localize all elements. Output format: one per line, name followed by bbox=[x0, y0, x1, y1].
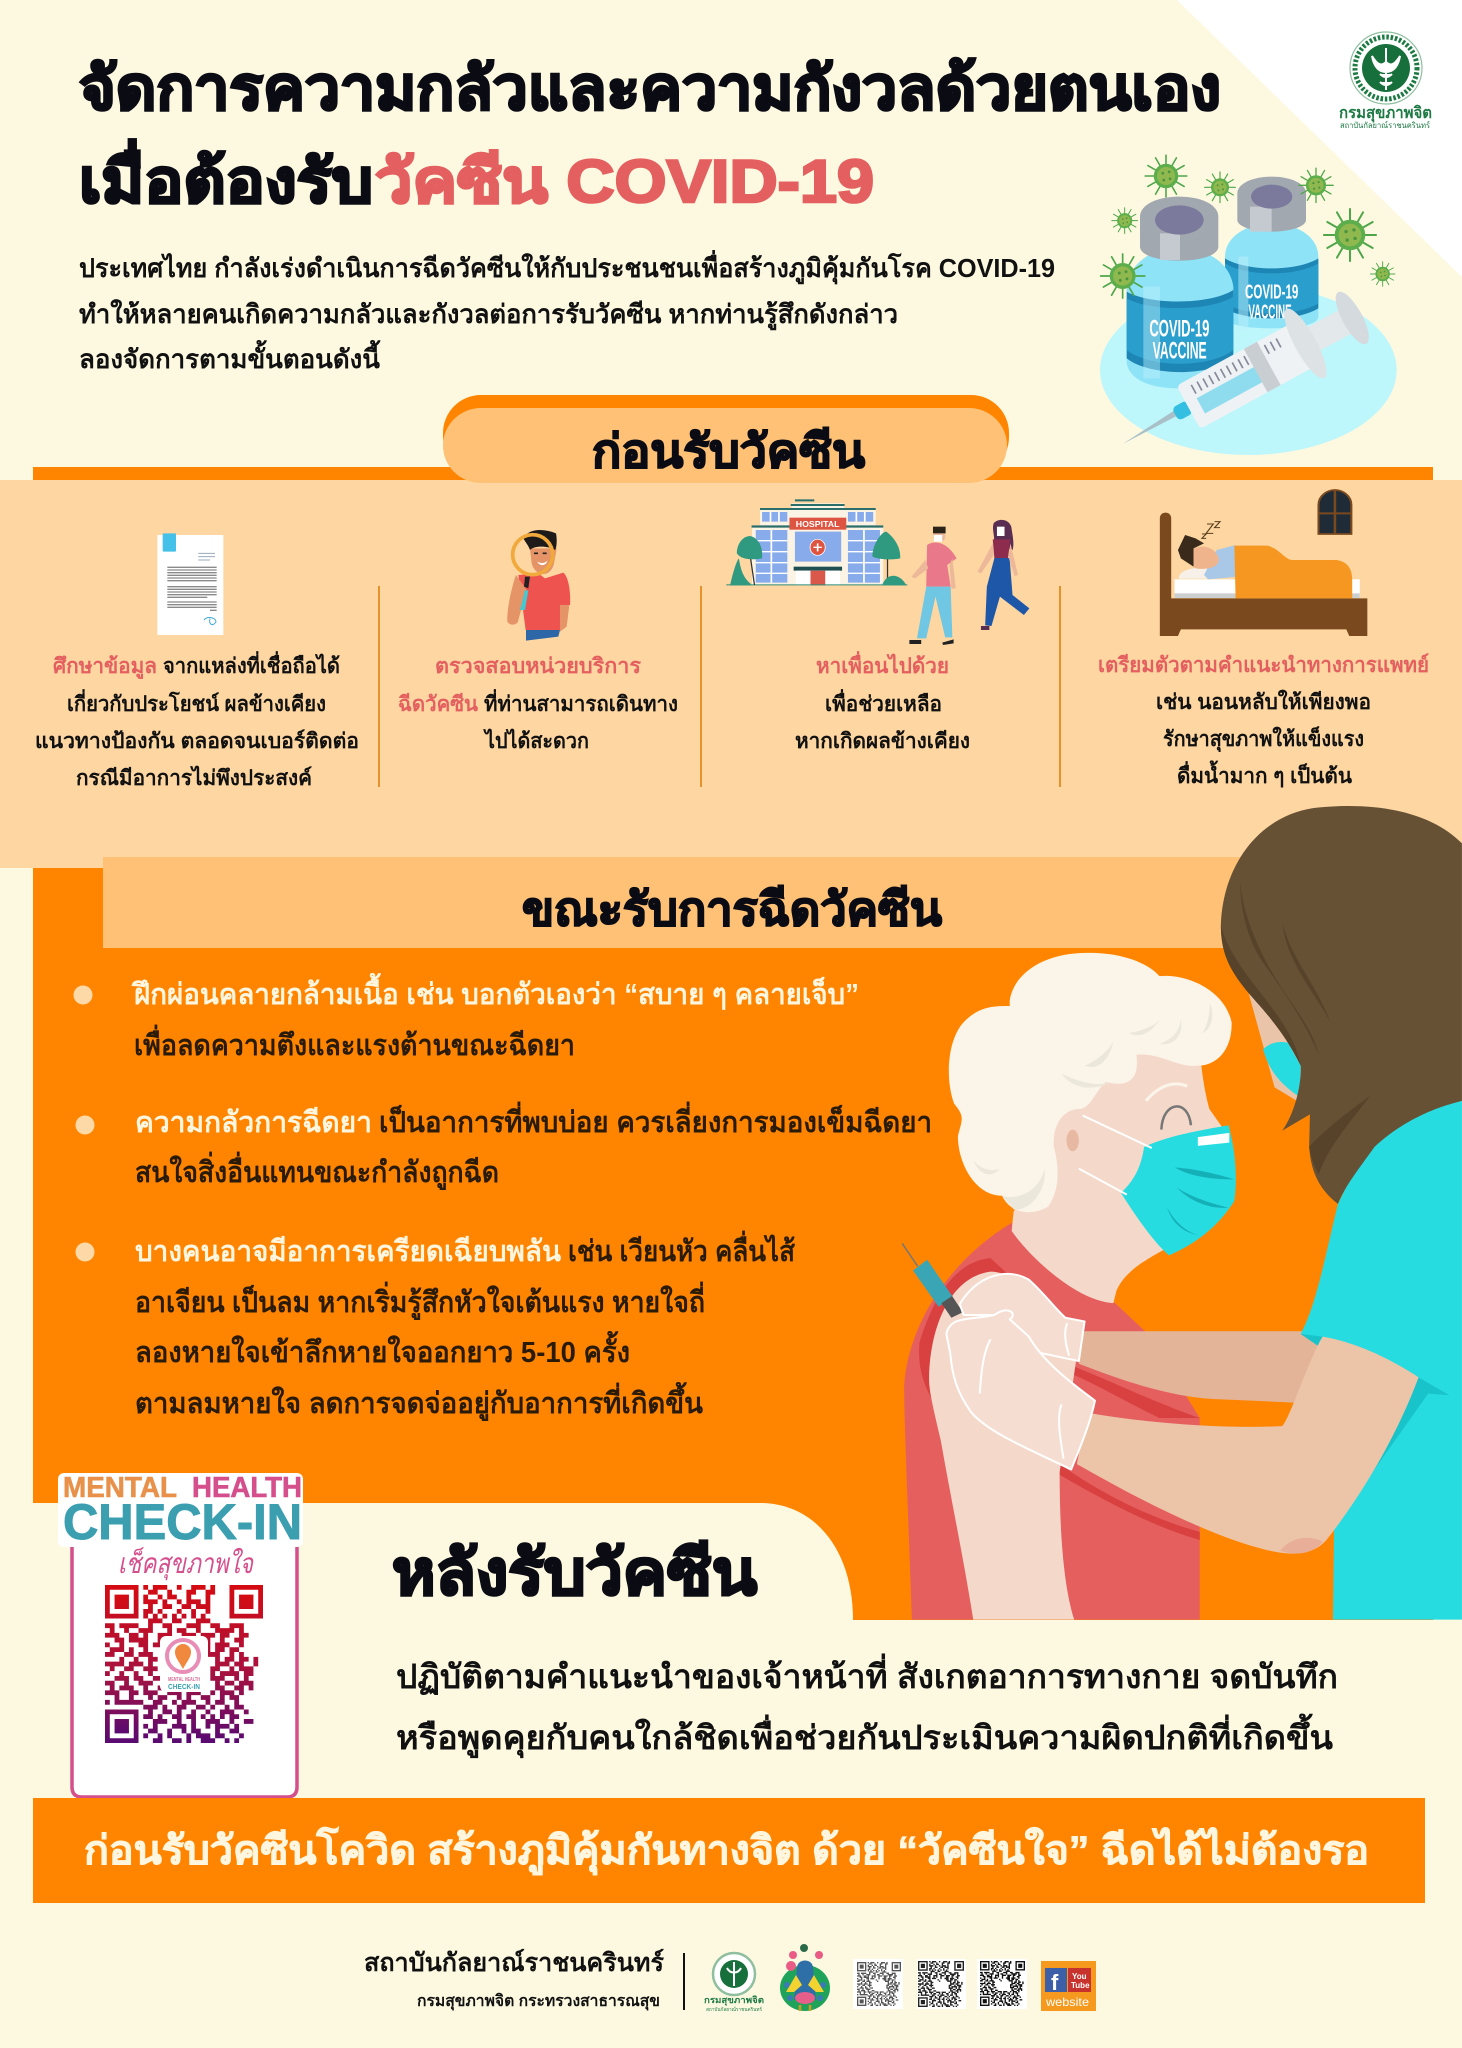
bullet list: ความกลัวการฉีดยา bbox=[135, 1107, 372, 1139]
text: step 2 check service: ตรวจสอบหน่วยบริการ bbox=[435, 655, 642, 678]
patient arm bbox=[929, 1272, 1079, 1620]
illustration: vaccine vials and syringe bbox=[1100, 155, 1397, 478]
vial back: COVID-19 bbox=[1245, 280, 1298, 303]
card: mental health check-in bbox=[58, 1472, 303, 1797]
bullet list: อาเจียน เป็นลม หากเริ่มรู้สึกหัวใจเต้นแรง หายใจถี่ bbox=[135, 1281, 705, 1320]
logo: department of mental health: สถาบันกัลยาณ์ราชนครินทร์ bbox=[1340, 120, 1431, 130]
patient eye and brow bbox=[1146, 1084, 1191, 1130]
footer logo: department: สถาบันกัลยาณ์ราชนครินทร์ bbox=[706, 2006, 762, 2013]
intro paragraph bbox=[79, 249, 1055, 374]
icon: hospital: HOSPITAL bbox=[796, 520, 840, 530]
vial front: VACCINE bbox=[1153, 337, 1207, 364]
card: mental health check-in: CHECK-IN bbox=[63, 1494, 302, 1550]
text: step 1 learn: จากแหล่งที่เชื่อถือได้ bbox=[163, 650, 340, 678]
bullet list: บางคนอาจมีอาการเครียดเฉียบพลัน bbox=[135, 1236, 561, 1268]
text: step 3 find a friend: หาเพื่อนไปด้วย bbox=[816, 650, 949, 678]
intro paragraph: ลองจัดการตามขั้นตอนดังนี้ bbox=[79, 339, 381, 374]
icon: two people walking bbox=[909, 520, 1029, 645]
footer logo: department bbox=[704, 1953, 764, 2013]
after-vaccination tab shape bbox=[33, 1503, 853, 1620]
heading: before vaccination: ก่อนรับวัคซีน bbox=[592, 425, 866, 477]
bullet list: เพื่อลดความตึงและแรงต้านขณะฉีดยา bbox=[134, 1024, 575, 1062]
panel: before vaccination bbox=[0, 395, 1462, 868]
intro paragraph: ประเทศไทย กำลังเร่งดำเนินการฉีดวัคซีนให้กับประชนชนเพื่อสร้างภูมิคุ้มกันโรค COVID-19 bbox=[79, 249, 1055, 285]
title bbox=[79, 55, 1221, 215]
footer icon: website: website bbox=[1045, 1995, 1089, 2009]
text: step 4 prepare: ดื่มน้ำมาก ๆ เป็นต้น bbox=[1177, 760, 1353, 788]
logo: department of mental health bbox=[1339, 32, 1432, 130]
illustration: nurse vaccinating patient bbox=[902, 806, 1462, 1620]
footer icon: website bbox=[1041, 1961, 1096, 2011]
text: step 1 learn: เกี่ยวกับประโยชน์ ผลข้างเคียง bbox=[67, 688, 326, 716]
heading: after vaccination: หลังรับวัคซีน bbox=[392, 1539, 757, 1608]
viruses bbox=[1101, 155, 1395, 298]
card: mental health check-in: MENTAL bbox=[63, 1472, 177, 1504]
title: จัดการความกลัวและความกังวลด้วยตนเอง bbox=[79, 55, 1221, 122]
banner bbox=[33, 1798, 1425, 1903]
intro paragraph: ทำให้หลายคนเกิดความกลัวและกังวลต่อการรับวัคซีน หากท่านรู้สึกดังกล่าว bbox=[79, 299, 898, 331]
text: step 4 prepare: รักษาสุขภาพให้แข็งแรง bbox=[1163, 725, 1364, 753]
bullet list: ตามลมหายใจ ลดการจดจ่ออยู่กับอาการที่เกิดขึ้น bbox=[135, 1381, 703, 1421]
text: step 3 find a friend: เพื่อช่วยเหลือ bbox=[825, 688, 942, 716]
bullet list: เป็นอาการที่พบบ่อย ควรเลี่ยงการมองเข็มฉีดยา bbox=[379, 1101, 932, 1139]
bullet list: ฝึกผ่อนคลายกล้ามเนื้อ เช่น บอกตัวเองว่า “สบาย ๆ คลายเจ็บ” bbox=[131, 972, 859, 1011]
text: after vaccination advice bbox=[396, 1653, 1338, 1759]
syringe bbox=[1104, 279, 1380, 478]
QR code bbox=[105, 1587, 261, 1741]
patient hair bbox=[949, 953, 1232, 1212]
vial front: COVID-19 bbox=[1149, 316, 1209, 343]
text: step 3 find a friend: หากเกิดผลข้างเคียง bbox=[795, 729, 970, 753]
icon: document bbox=[157, 533, 223, 635]
text: step 1 learn bbox=[35, 650, 359, 790]
footer text: กรมสุขภาพจิต กระทรวงสาธารณสุข bbox=[417, 1992, 660, 2011]
text: step 4 prepare: เตรียมตัวตามคำแนะนำทางการแพทย์ bbox=[1098, 653, 1429, 677]
gloves bbox=[946, 1274, 1095, 1469]
nurse face and mask bbox=[1248, 990, 1301, 1104]
text: after vaccination advice: ปฏิบัติตามคำแนะนำของเจ้าหน้าที่ สังเกตอาการทางกาย จดบันทึก bbox=[396, 1653, 1338, 1695]
icon: window bbox=[1319, 490, 1351, 534]
text: step 2 check service: ที่ท่านสามารถเดินทาง bbox=[484, 688, 678, 716]
bullet list: ลองหายใจเข้าลึกหายใจออกยาว 5-10 ครั้ง bbox=[135, 1330, 630, 1369]
title: วัคซีน COVID-19 bbox=[375, 148, 874, 215]
patient neck and face bbox=[1012, 1033, 1229, 1303]
banner: ก่อนรับวัคซีนโควิด สร้างภูมิคุ้มกันทางจิต ด้วย “วัคซีนใจ” ฉีดได้ไม่ต้องรอ bbox=[84, 1827, 1369, 1876]
bullet list: สนใจสิ่งอื่นแทนขณะกำลังถูกฉีด bbox=[135, 1151, 499, 1190]
patient mask bbox=[1079, 1116, 1236, 1255]
text: step 4 prepare bbox=[1098, 653, 1429, 788]
nurse near arm bbox=[1077, 1337, 1419, 1554]
heading: during vaccination: ขณะรับการฉีดวัคซีน bbox=[522, 883, 943, 935]
patient shirt bbox=[904, 1223, 1200, 1620]
text: after vaccination advice: หรือพูดคุยกับคนใกล้ชิดเพื่อช่วยกันประเมินความผิดปกติที่เกิดขึ้น bbox=[396, 1713, 1333, 1759]
patient ear bbox=[1053, 1110, 1088, 1171]
footer icon: website: f bbox=[1051, 1970, 1059, 1995]
footer logo: peacock bbox=[780, 1944, 830, 2011]
QR code: CHECK-IN bbox=[168, 1684, 200, 1691]
icon: hospital bbox=[726, 499, 907, 585]
text: step 3 find a friend bbox=[795, 650, 970, 753]
title: เมื่อต้องรับ bbox=[79, 139, 373, 215]
vial back bbox=[1225, 177, 1318, 330]
syringe in hand bbox=[902, 1243, 963, 1318]
bullet list bbox=[74, 972, 932, 1421]
nurse hair bbox=[1221, 806, 1462, 1204]
text: step 1 learn: กรณีมีอาการไม่พึงประสงค์ bbox=[76, 765, 312, 790]
text: step 2 check service: ฉีดวัคซีน bbox=[398, 692, 479, 716]
footer text: สถาบันกัลยาณ์ราชนครินทร์ bbox=[364, 1948, 665, 1977]
text: step 2 check service: ไปได้สะดวก bbox=[483, 728, 589, 753]
after-vaccination bottom strip bbox=[0, 1620, 1462, 1798]
footer logo: department: กรมสุขภาพจิต bbox=[704, 1995, 764, 2006]
woman bbox=[978, 520, 1029, 630]
footer icon: website: Tube bbox=[1071, 1981, 1090, 1990]
icon: person sleeping in bed bbox=[1160, 513, 1367, 636]
vial front bbox=[1127, 197, 1233, 388]
text: step 4 prepare: เช่น นอนหลับให้เพียงพอ bbox=[1156, 689, 1371, 714]
text: step 1 learn: แนวทางป้องกัน ตลอดจนเบอร์ติดต่อ bbox=[35, 729, 359, 753]
logo: department of mental health: กรมสุขภาพจิต bbox=[1339, 104, 1432, 123]
icon: person with magnifier bbox=[507, 530, 570, 641]
text: step 1 learn: ศึกษาข้อมูล bbox=[53, 654, 157, 680]
vial back: VACCINE bbox=[1248, 300, 1292, 323]
panel: during vaccination bbox=[33, 857, 1433, 1620]
footer text bbox=[364, 1948, 685, 2011]
man bbox=[909, 527, 957, 645]
text: step 2 check service bbox=[398, 655, 678, 753]
card: mental health check-in: เช็คสุขภาพใจ bbox=[118, 1547, 254, 1581]
nurse body bbox=[1301, 1101, 1462, 1620]
bullet list: เช่น เวียนหัว คลื่นไส้ bbox=[568, 1230, 795, 1268]
footer icon: website: You bbox=[1072, 1972, 1087, 1981]
footer QR codes bbox=[853, 1959, 1027, 2009]
nurse far arm bbox=[1079, 1331, 1323, 1403]
card: mental health check-in: HEALTH bbox=[192, 1472, 302, 1504]
QR code: MENTAL HEALTH bbox=[168, 1677, 200, 1683]
